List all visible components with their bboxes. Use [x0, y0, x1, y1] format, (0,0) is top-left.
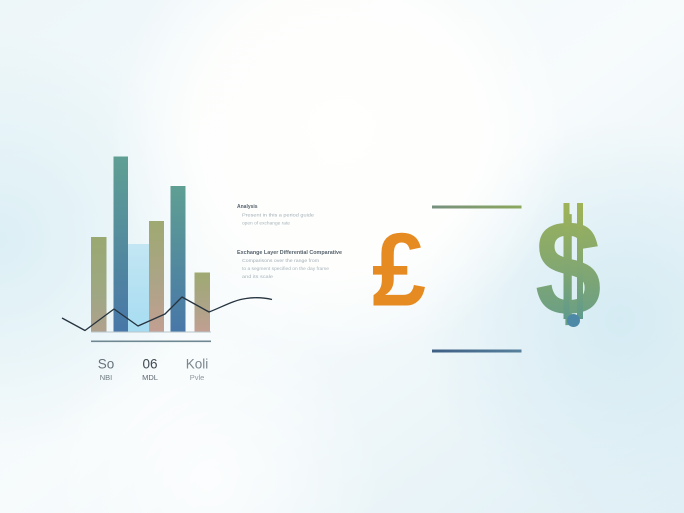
text block 1	[237, 204, 314, 226]
top rule	[432, 206, 522, 208]
icon: pound sign: £	[372, 212, 426, 328]
axis label: So NBI	[98, 356, 114, 382]
bar 2	[114, 156, 128, 332]
dollar dot	[567, 314, 580, 327]
bar 1	[91, 237, 106, 332]
axis label: Koli Pvle	[186, 356, 208, 382]
bar 6	[194, 272, 210, 332]
bottom rule	[432, 350, 522, 352]
text block 2: Exchange Layer Differential Comparative	[237, 250, 342, 256]
bar 3 light	[128, 244, 149, 332]
text block 1: open of exchange rate	[242, 220, 290, 226]
bar 4	[149, 221, 164, 332]
baseline	[91, 332, 211, 333]
trend line	[62, 297, 272, 330]
text block 1: Analysis	[237, 204, 258, 210]
axis label: 06 MDL: 06	[142, 356, 158, 372]
text block 2: and its scale	[242, 274, 273, 280]
axis label: So NBI: NBI	[100, 373, 112, 382]
axis label: Koli Pvle: Koli	[186, 356, 208, 372]
axis label: 06 MDL: MDL	[142, 373, 158, 382]
bar chart	[62, 156, 272, 342]
axis label: Koli Pvle: Pvle	[190, 373, 204, 382]
text block 1: Present in this a period guide	[242, 212, 314, 218]
bar 5	[170, 186, 186, 332]
text block 2: to a segment specified on the day frame	[242, 266, 329, 272]
text block 2: Comparisons over the range from	[242, 258, 319, 264]
axis label: 06 MDL	[142, 356, 158, 382]
axis label: So NBI: So	[98, 356, 114, 372]
dollar bar right	[577, 203, 583, 319]
axis bar	[91, 340, 211, 342]
text block 2	[237, 250, 342, 280]
dollar bar left	[564, 203, 570, 319]
icon: dollar sign: $	[535, 193, 602, 345]
